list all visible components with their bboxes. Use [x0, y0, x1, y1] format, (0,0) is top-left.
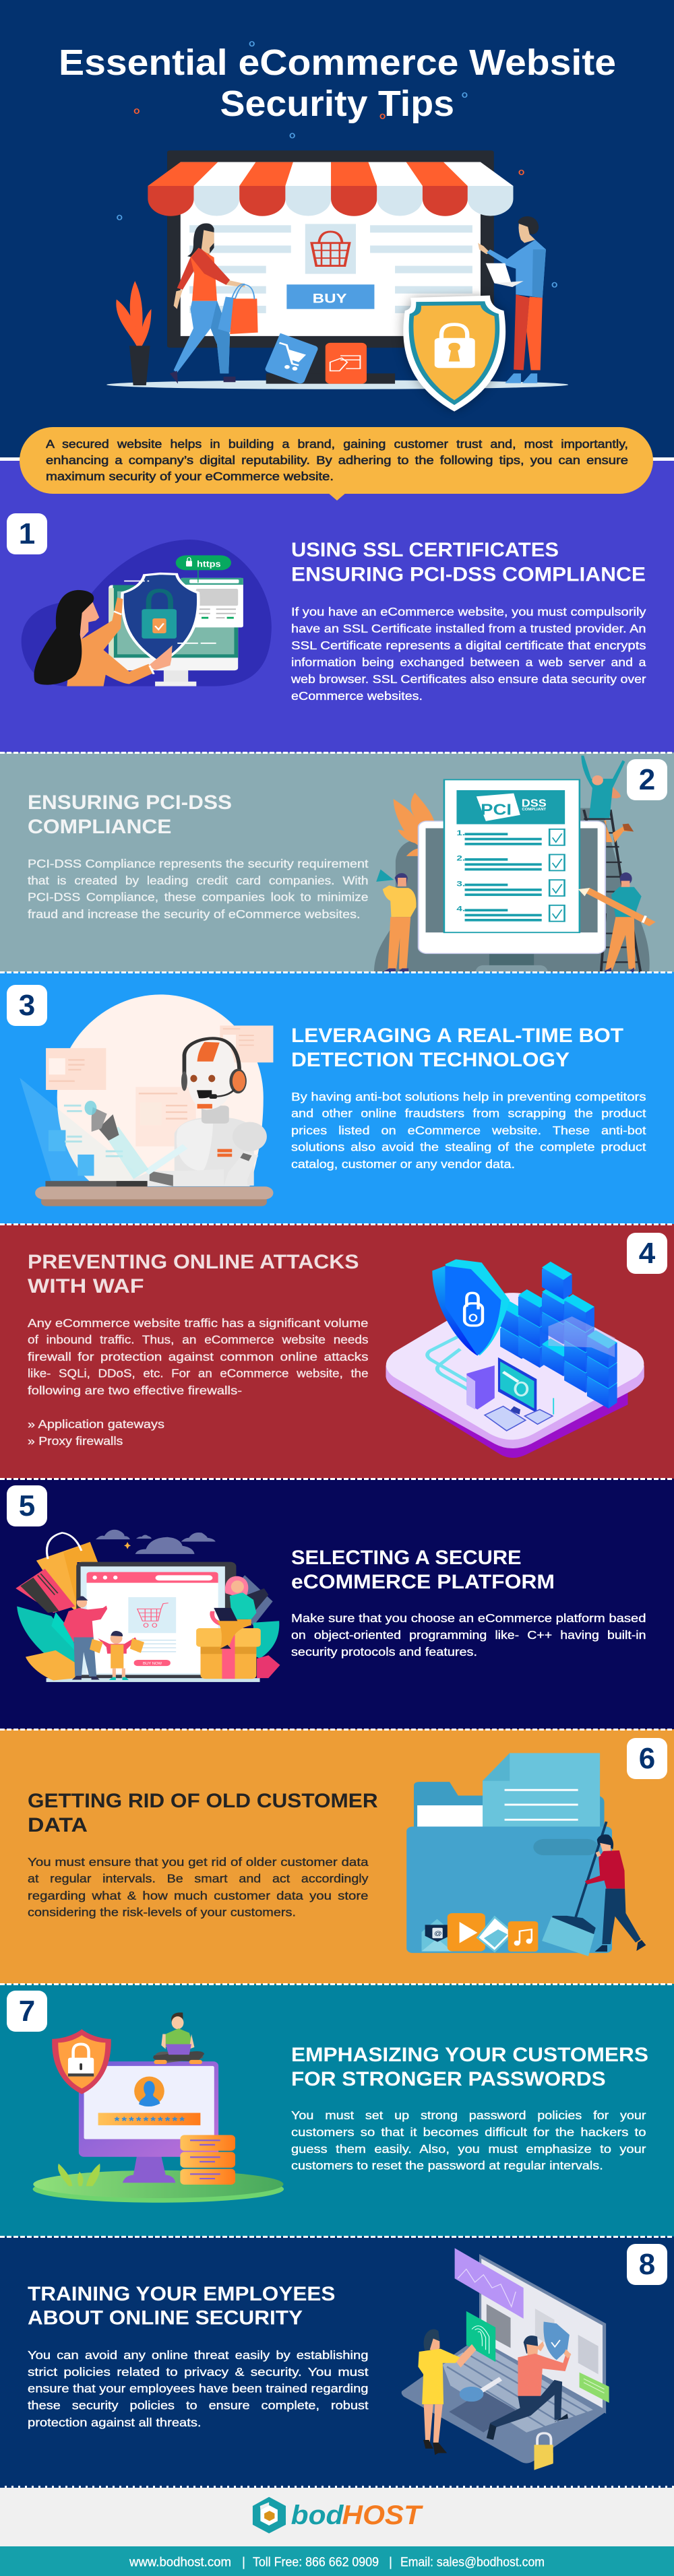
body text: PCI-DSS Compliance, these companies look to minimize — [28, 890, 368, 903]
clouds — [96, 1529, 216, 1554]
title — [59, 42, 616, 124]
body text: SSL Certificate represents a digital certificate that encrypts — [291, 639, 646, 652]
checklist document — [444, 779, 580, 932]
store content bars — [189, 226, 472, 313]
body text: If you have an eCommerce website, you must compulsorily — [291, 605, 646, 618]
body text: You must set up strong password policies for your — [291, 2108, 646, 2122]
shield with padlock — [122, 574, 216, 663]
heading: COMPLIANCE — [28, 815, 171, 837]
green message panel — [580, 2372, 609, 2402]
number badge 5 — [7, 1485, 47, 1526]
body text: catalog, customer or any vendor data. — [291, 1157, 515, 1170]
intro callout: enhancing a company’s digital reputability. By adhering to the following tips, you can ensure — [46, 453, 628, 467]
purple chart panel — [455, 2248, 524, 2319]
body text and firewall list: » Proxy firewalls — [28, 1434, 123, 1448]
heading: ABOUT ONLINE SECURITY — [28, 2307, 303, 2329]
panel: section 8 employee training — [0, 2236, 674, 2486]
heading: GETTING RID OF OLD CUSTOMER — [28, 1790, 378, 1812]
number badge 8: 8 — [639, 2248, 655, 2281]
panel: section 4 web application firewall — [0, 1224, 674, 1479]
checklist document: 3. — [456, 879, 465, 887]
child with bags — [90, 1631, 144, 1680]
man with laptop on monitor — [153, 2013, 204, 2064]
security shield — [432, 1259, 510, 1355]
heading — [291, 1547, 555, 1593]
desktop monitor — [109, 585, 238, 686]
man sweeping — [584, 1834, 646, 1952]
heading: DETECTION TECHNOLOGY — [291, 1049, 570, 1071]
ladder — [584, 809, 640, 972]
logo band — [0, 2486, 674, 2546]
body text: eCommerce websites. — [291, 688, 423, 702]
illustration: login screen with shield and server — [32, 2013, 284, 2203]
body text — [28, 2348, 369, 2429]
heading — [28, 792, 232, 837]
heading: LEVERAGING A REAL-TIME BOT — [291, 1025, 623, 1047]
woman with laptop on gift — [214, 1576, 257, 1648]
body text: regarding what & how much customer data you store — [28, 1888, 368, 1902]
man with megaphone — [376, 869, 417, 972]
footer contact bar: | — [389, 2556, 392, 2569]
illustration: man sweeping files from folder — [406, 1753, 646, 1956]
woman with shopping bags — [170, 224, 258, 384]
body text: You must ensure that you get rid of older customer data — [28, 1855, 369, 1869]
heading: WITH WAF — [28, 1275, 144, 1297]
illustration: PCI DSS checklist with team — [374, 756, 656, 972]
heading: eCOMMERCE PLATFORM — [291, 1571, 555, 1593]
monitor: ********** — [115, 2115, 185, 2127]
dark card behind — [228, 1575, 273, 1625]
https badge: https — [196, 560, 221, 569]
footer contact bar: | — [242, 2556, 245, 2569]
logo: bodHOST — [252, 2497, 424, 2534]
man with giant pencil — [578, 872, 656, 972]
heading — [28, 1790, 378, 1836]
security shield with padlock — [403, 296, 506, 412]
computer — [466, 1357, 553, 1431]
server stack — [180, 2135, 235, 2185]
browser window — [181, 578, 243, 627]
number badge 1: 1 — [19, 517, 35, 550]
body text: prices listed on eCommerce website. These anti-bot — [291, 1124, 646, 1137]
logo: bodHOST: bod — [291, 2501, 344, 2530]
number badge 6: 6 — [639, 1742, 655, 1775]
fingerprint panel — [466, 2311, 495, 2362]
body text and firewall list: of inbound traffic. Thus, an eCommerce website needs — [28, 1332, 369, 1346]
icon: shopping basket — [305, 224, 356, 274]
body text — [28, 857, 369, 921]
body text: customers to reset the password at regular intervals. — [291, 2158, 603, 2172]
heading: EMPHASIZING YOUR CUSTOMERS — [291, 2044, 648, 2066]
footer contact bar: Email: sales@bodhost.com — [400, 2556, 545, 2569]
intro callout: A secured website helps in building a brand, gaining customer trust and, most importantly, — [46, 437, 628, 451]
shield with lock — [52, 2029, 111, 2094]
shopping bag — [36, 1533, 98, 1613]
illustration: online storefront with shoppers and security shield — [106, 150, 568, 412]
robot arm — [84, 1101, 148, 1179]
footer contact bar: Toll Free: 866 662 0909 — [253, 2556, 379, 2569]
body text: protection against all threats. — [28, 2416, 201, 2429]
footer contact bar: www.bodhost.com — [129, 2556, 231, 2569]
number badge 2 — [627, 759, 667, 800]
key — [460, 2379, 501, 2402]
checklist document: 2. — [456, 854, 465, 862]
woman in yellow dress — [419, 2329, 477, 2455]
illustration: isometric firewall with shield and computer — [386, 1259, 644, 1458]
body text: fraud and increase the security of eCommerce websites. — [28, 907, 360, 921]
body text: information being exchanged between a web server and a — [291, 655, 646, 668]
monitor — [79, 2061, 218, 2183]
body text — [290, 605, 646, 702]
number badge 5: 5 — [19, 1489, 35, 1522]
icon: shopping cart tile — [266, 333, 318, 384]
folder back — [414, 1782, 604, 1828]
awning — [148, 162, 514, 216]
number badge 1 — [7, 513, 47, 554]
robot head with headset — [181, 1039, 246, 1110]
illustration: robot operator with headset — [20, 994, 274, 1206]
logo: bodHOST: HOST — [342, 2501, 424, 2530]
body text and firewall list: » Application gateways — [28, 1417, 164, 1430]
body text — [28, 1855, 369, 1919]
body text: You can avoid any online threat easily by establishing — [28, 2348, 368, 2362]
floating windows — [46, 1026, 273, 1176]
heading: DATA — [28, 1814, 88, 1836]
illustration: employees on oversized laptop — [402, 2248, 609, 2470]
footer contact bar — [0, 2546, 674, 2576]
monitor — [419, 820, 605, 972]
platform — [386, 1293, 644, 1458]
buy button — [286, 285, 375, 309]
body text: and other online fraudsters from scrapping the product — [291, 1106, 646, 1120]
cube wall — [500, 1262, 617, 1409]
green ground disc — [32, 2170, 284, 2203]
body text: Make sure that you choose an eCommerce platform based — [291, 1611, 646, 1625]
body text and firewall list: firewall for protection against common online attacks — [28, 1349, 369, 1363]
intro callout: maximum security of your eCommerce website. — [46, 470, 334, 483]
heading: USING SSL CERTIFICATES — [291, 539, 559, 561]
body text: considering the risk-levels of your customers. — [28, 1905, 296, 1919]
body text and firewall list: following are two effective firewalls- — [28, 1383, 242, 1396]
orange leaves — [394, 792, 435, 856]
https badge — [175, 555, 231, 583]
number badge 8 — [627, 2244, 667, 2285]
number badge 7 — [7, 1991, 47, 2032]
floor — [106, 381, 568, 389]
number badge 6 — [627, 1738, 667, 1779]
heading: FOR STRONGER PASSWORDS — [291, 2068, 606, 2090]
buy button: BUY — [313, 292, 347, 306]
body text and firewall list: Any eCommerce website traffic has a significant volume — [28, 1316, 368, 1330]
body text: have an SSL Certificate installed from a trusted provider. An — [291, 621, 646, 635]
folder front — [406, 1826, 612, 1953]
woman on ladder — [581, 755, 634, 843]
heading: TRAINING YOUR EMPLOYEES — [28, 2283, 335, 2305]
panel: section 2 PCI-DSS compliance — [0, 752, 674, 972]
desk and laptop — [35, 1181, 273, 1206]
leaves — [17, 1606, 280, 1680]
pipes — [427, 1331, 468, 1390]
man with laptop — [478, 217, 546, 383]
padlock — [534, 2433, 553, 2470]
laptop: BUY NOW — [143, 1661, 162, 1665]
number badge 4 — [627, 1233, 667, 1274]
body text: these security policies to ensure complete, robust — [28, 2398, 369, 2412]
gift box — [196, 1611, 261, 1679]
credit card — [16, 1568, 75, 1613]
document — [483, 1753, 600, 1826]
panel: section 5 secure eCommerce platform — [0, 1479, 674, 1729]
body text: customers so that it becomes difficult for the hackers to — [291, 2125, 646, 2139]
monitor — [167, 151, 494, 384]
laptop — [402, 2254, 606, 2463]
panel: section 6 old customer data — [0, 1729, 674, 1984]
checklist document: COMPLIANT — [522, 807, 546, 811]
number badge 7: 7 — [19, 1995, 35, 2028]
heading — [28, 2283, 335, 2329]
checklist document: DSS — [522, 798, 547, 809]
number badge 2: 2 — [639, 763, 655, 796]
file icons: @ — [434, 1931, 441, 1937]
body text: security protocols and features. — [291, 1645, 477, 1659]
body text — [291, 1611, 646, 1659]
body text and firewall list — [27, 1316, 369, 1448]
illustration: woman protecting website with shield and https — [22, 540, 272, 686]
body text: on object-oriented programming like- C++ having built-in — [291, 1629, 646, 1642]
robot body — [129, 1105, 266, 1186]
icon: payment card tile — [326, 343, 367, 384]
laptop — [47, 1561, 260, 1682]
title: Security Tips — [220, 84, 454, 124]
body text: that is created by leading credit card companies. With — [28, 874, 368, 887]
heading — [291, 2044, 648, 2090]
body text: guess them easily. Also, you must emphasize to your — [291, 2142, 646, 2156]
heading — [28, 1251, 359, 1297]
illustration: shoppers around laptop storefront — [16, 1529, 280, 1682]
intro callout — [0, 427, 674, 501]
panel: section 7 stronger passwords — [0, 1984, 674, 2236]
body text: solutions also avoid the stealing of the complete product — [291, 1140, 646, 1153]
body text — [291, 1090, 646, 1171]
title: Essential eCommerce Website — [59, 42, 616, 83]
body text: By having anti-bot solutions help in preventing competitors — [291, 1090, 646, 1103]
body text: PCI-DSS Compliance represents the security requirement — [28, 857, 369, 870]
number badge 4: 4 — [639, 1237, 655, 1270]
body text: web browser. SSL Certificates also ensure data security over — [290, 672, 646, 686]
man in pink hoodie — [63, 1596, 107, 1679]
heading — [291, 1025, 623, 1071]
file icons — [421, 1913, 538, 1952]
body text — [291, 2108, 646, 2172]
heading — [291, 539, 646, 586]
body text: ensure that your employees have been trained regarding — [28, 2381, 368, 2395]
heading: ENSURING PCI-DSS — [28, 792, 232, 814]
man kneeling — [487, 2336, 572, 2440]
panel: section 3 bot detection — [0, 972, 674, 1224]
heading: PREVENTING ONLINE ATTACKS — [28, 1251, 359, 1273]
panel: section 1 using SSL certificates — [0, 461, 674, 752]
woman — [34, 590, 172, 686]
plant — [116, 282, 151, 385]
checklist document: 1. — [456, 829, 465, 837]
body text: strict policies related to privacy & security. You must — [28, 2365, 369, 2379]
broom — [542, 1822, 606, 1956]
number badge 3 — [7, 985, 47, 1026]
checklist document: 4. — [456, 904, 465, 913]
plant — [58, 2164, 100, 2186]
checklist document: PCI — [481, 801, 512, 818]
heading: SELECTING A SECURE — [291, 1547, 522, 1569]
security shield panel — [543, 2321, 570, 2360]
heading: ENSURING PCI-DSS COMPLIANCE — [291, 564, 646, 586]
body text and firewall list: like- SQLi, DDoS, etc. For an eCommerce website, the — [28, 1366, 368, 1380]
number badge 3: 3 — [19, 989, 35, 1022]
body text: at regular intervals. Be smart and act accordingly — [28, 1871, 369, 1885]
